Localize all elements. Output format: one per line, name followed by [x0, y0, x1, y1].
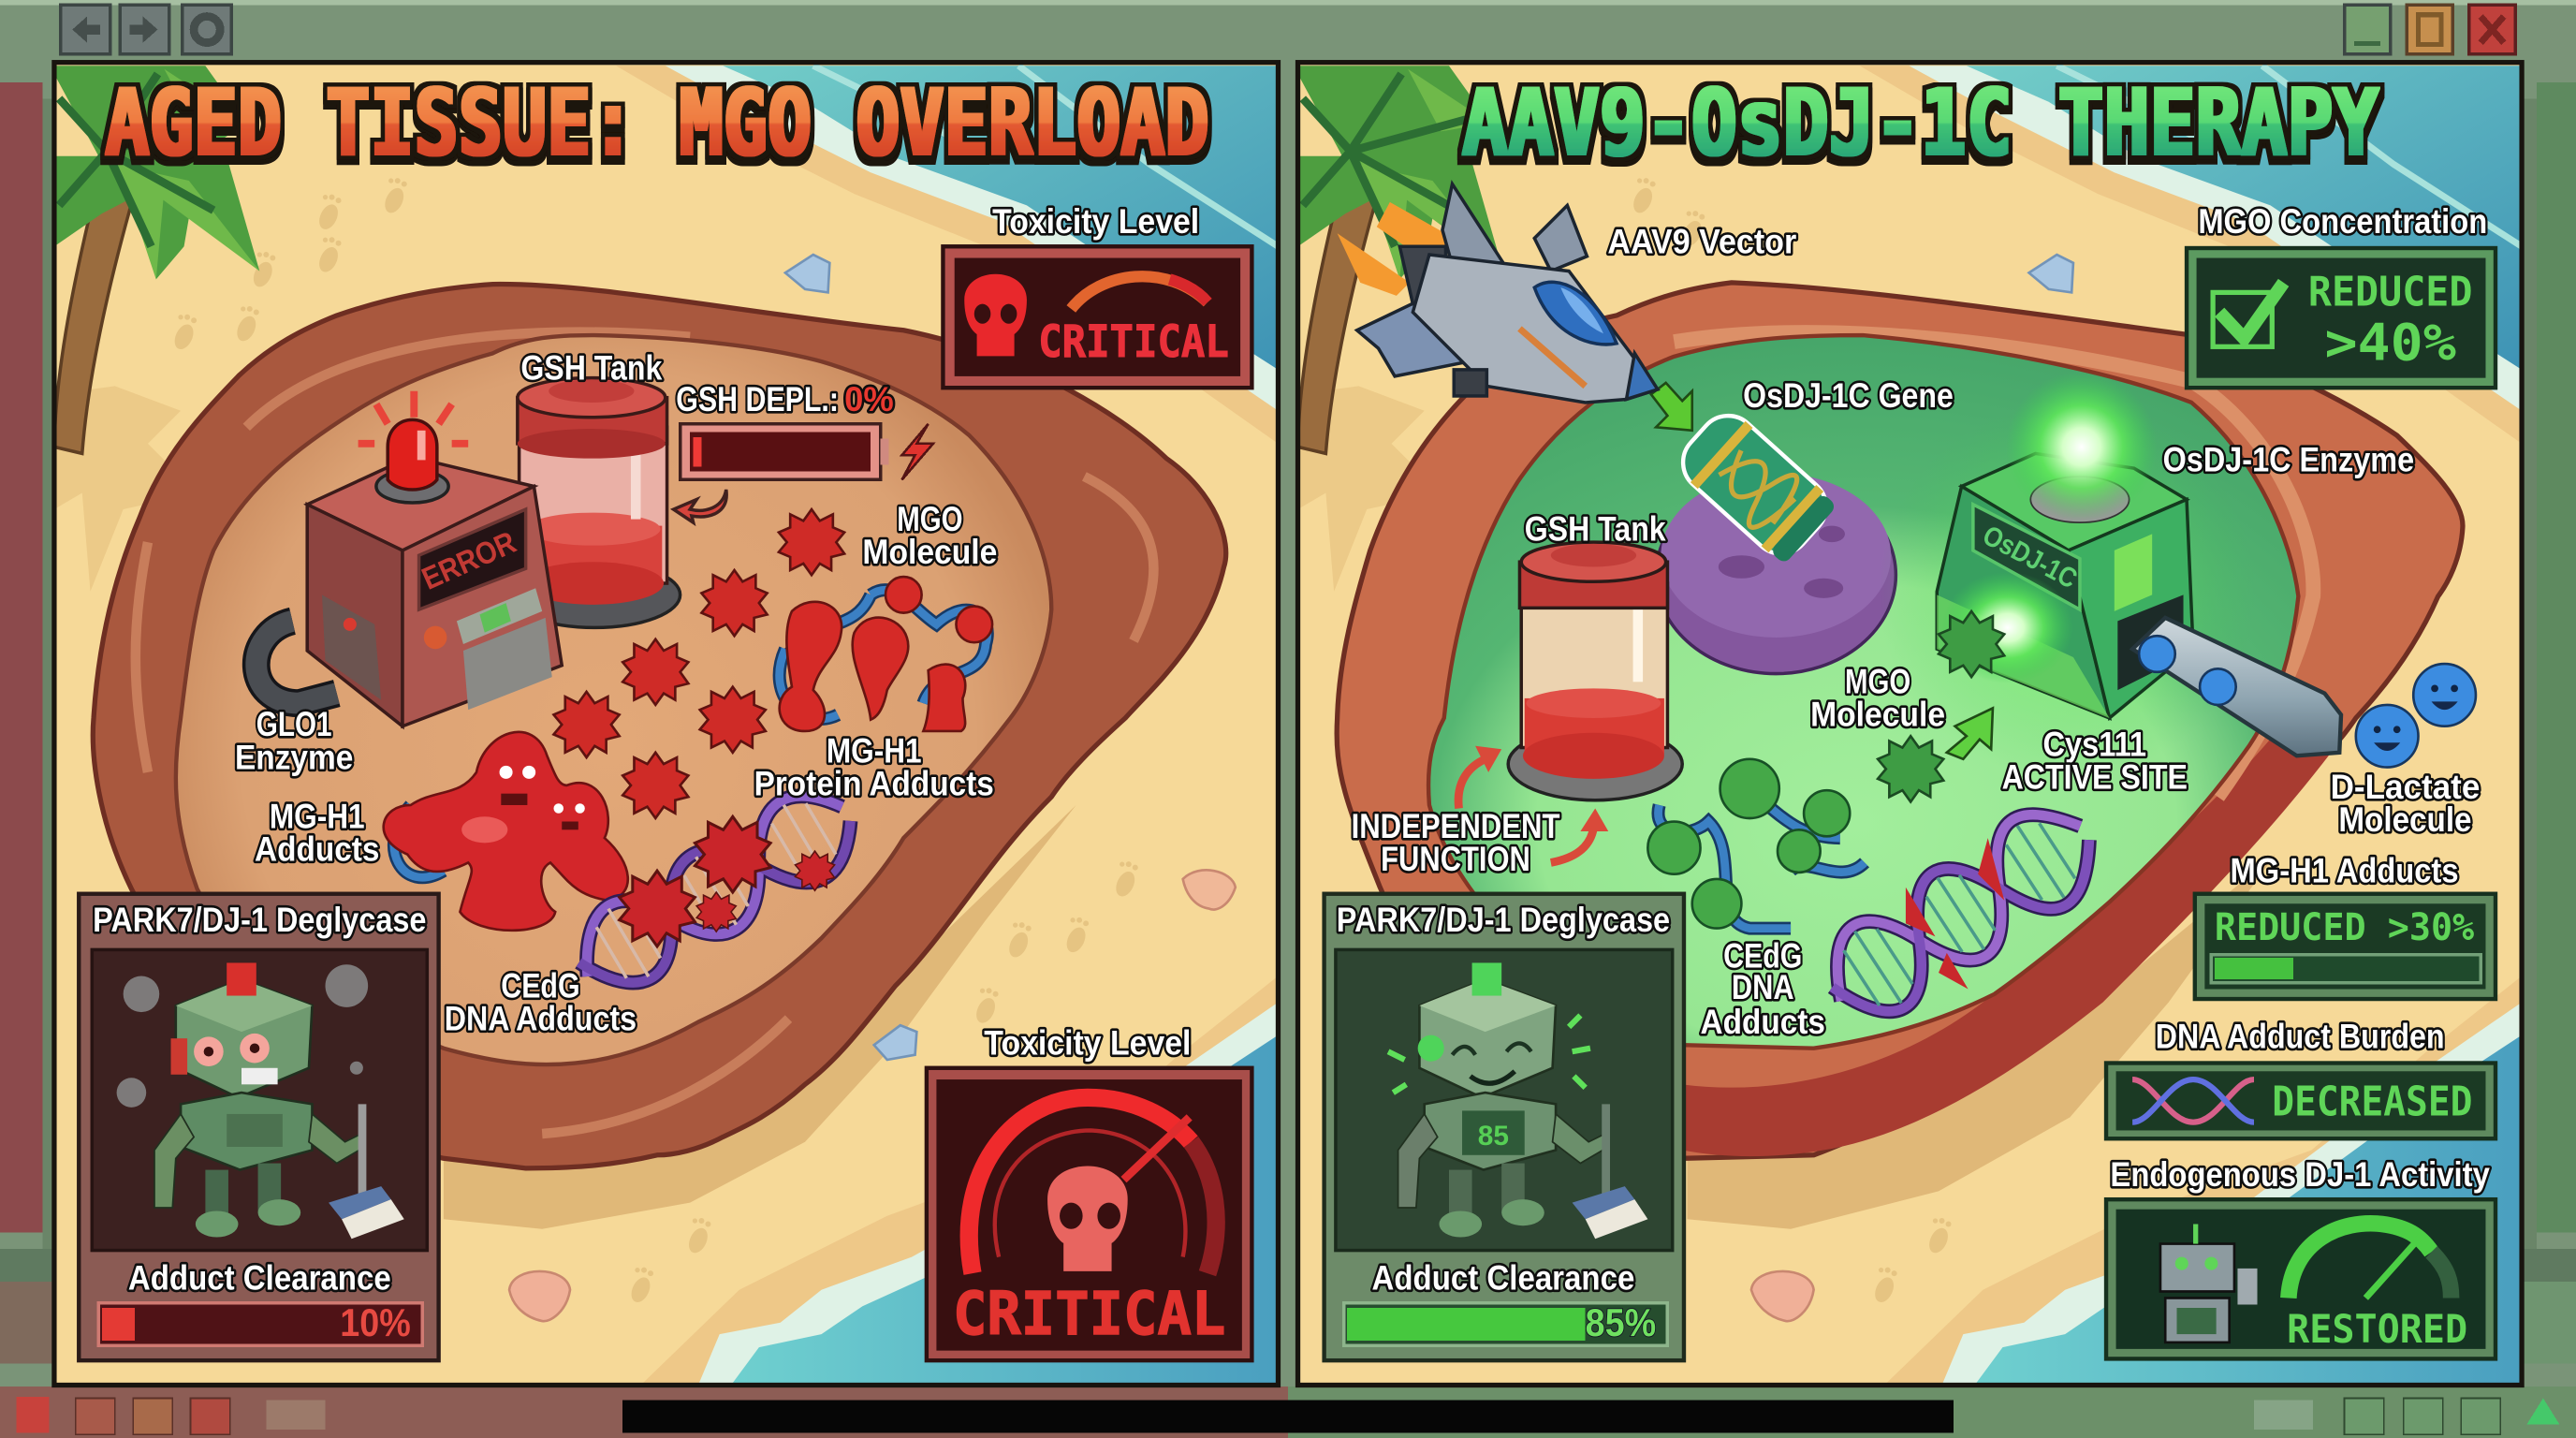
- arrow: mgo to site: [1947, 708, 1993, 759]
- footprints: [1630, 178, 1952, 1305]
- labels: therapy: MGO: [1845, 663, 1910, 701]
- osdj-1c gene capsule: [1671, 404, 1838, 565]
- icon: big skull: [1047, 1166, 1128, 1271]
- cell interior: [1428, 335, 2298, 1049]
- restored: RESTORED: [2287, 1306, 2467, 1352]
- membrane highlight streaks: [136, 332, 1153, 1134]
- labels: aged tissue: MG-H1: [270, 798, 365, 836]
- osdj-1c enzyme machine: [1937, 372, 2193, 718]
- membrane dark lower rim: [1682, 723, 2341, 1156]
- icon: dna: [2132, 1079, 2254, 1123]
- palm shadow: [1298, 386, 1441, 592]
- labels: aged tissue: 0%: [844, 380, 894, 418]
- right taskbar buttons: [2254, 1399, 2559, 1434]
- robot: broken: [117, 962, 404, 1239]
- critical big text: CRITICAL: [953, 1279, 1225, 1348]
- adduct clearance label: Adduct Clearance: [128, 1259, 391, 1298]
- title text: PARK7/DJ-1 Deglycase: [1337, 901, 1670, 939]
- labels: therapy: [1352, 222, 2480, 1041]
- top-left navigation buttons: [61, 5, 231, 54]
- shell bottom: [1751, 1271, 1814, 1321]
- reduced: REDUCED: [2308, 268, 2472, 315]
- dna repaired: [1809, 791, 2112, 1036]
- gauge: [2289, 1224, 2452, 1298]
- labels: therapy: D-Lactate: [2331, 768, 2480, 806]
- conveyor slide: [2132, 618, 2341, 756]
- 10 percent: 10%: [340, 1300, 411, 1344]
- right green side column: [2522, 82, 2576, 1364]
- reduced 30: REDUCED >30%: [2215, 905, 2475, 949]
- title: therapy: AAV9-OsDJ-1C THERAPY: [1462, 70, 2378, 177]
- panel: mg-h1 adducts: [2195, 894, 2496, 999]
- shell right: [1183, 870, 1236, 910]
- title: aged tissue: AGED TISSUE: MGO OVERLOAD: [105, 70, 1209, 177]
- heading: mgo concentration: MGO Concentration: [2198, 202, 2487, 241]
- heading: toxicity level lower: Toxicity Level: [984, 1024, 1191, 1063]
- panel: deglycase broken robot: [79, 894, 439, 1360]
- labels: therapy: Adducts: [1701, 1003, 1825, 1041]
- independent arrows: [1458, 746, 1608, 862]
- enzyme glow: [1878, 403, 2256, 781]
- d-lactate smiles: [2139, 636, 2476, 768]
- aav9 vector ship: [1338, 184, 1658, 403]
- panel: therapy: [1298, 63, 2522, 1385]
- labels: therapy: Molecule: [1810, 696, 1945, 734]
- robot: happy: 85: [1478, 1121, 1509, 1152]
- nucleus: [1656, 473, 1895, 674]
- bottom taskbar: [17, 1397, 2559, 1434]
- icon: check: [2213, 283, 2284, 346]
- heading: toxicity level: Toxicity Level: [992, 202, 1199, 241]
- icon: red siren: [359, 391, 468, 503]
- cedg dna with adducts: [561, 776, 869, 1007]
- labels: therapy: AAV9 Vector: [1607, 222, 1796, 260]
- left red side column: [0, 82, 54, 1364]
- panel border: [54, 63, 1278, 1385]
- labels: therapy: DNA: [1732, 968, 1794, 1006]
- labels: therapy: OsDJ-1C Gene: [1743, 376, 1954, 415]
- labels: therapy: Cys111: [2042, 725, 2146, 763]
- gsh battery gauge: [681, 424, 933, 479]
- labels: aged tissue: Molecule: [862, 533, 997, 571]
- left taskbar buttons: [17, 1397, 326, 1434]
- arrow: depletion: [674, 490, 726, 522]
- blue rock lower: [874, 1025, 916, 1060]
- glo1 enzyme machine: ERROR: [417, 525, 521, 597]
- labels: aged tissue: GSH Tank: [520, 348, 663, 387]
- labels: therapy: ACTIVE SITE: [2002, 757, 2188, 796]
- top-right window controls: [2345, 5, 2515, 54]
- labels: therapy: INDEPENDENT: [1352, 807, 1560, 845]
- adduct clearance bar: [1344, 1303, 1667, 1345]
- green protein: [1647, 759, 1865, 929]
- scroll track: [622, 1400, 1954, 1432]
- mgo molecules: [553, 509, 844, 818]
- adduct clearance label: Adduct Clearance: [1372, 1259, 1634, 1298]
- labels: therapy: GSH Tank: [1525, 509, 1666, 548]
- gsh tank: [1508, 542, 1682, 800]
- labels: therapy: FUNCTION: [1381, 840, 1530, 878]
- bar: [2211, 955, 2481, 983]
- blue rock: [785, 255, 829, 292]
- palm tree: [1298, 66, 1503, 453]
- green mgo molecules: [1878, 611, 2004, 801]
- greater 40: >40%: [2324, 313, 2456, 372]
- mg-h1 adducts blob: [384, 732, 628, 931]
- labels: aged tissue: MGO: [897, 500, 962, 538]
- labels: therapy: CEdG: [1723, 937, 1802, 976]
- palm tree: [54, 66, 259, 453]
- adduct clearance bar: [98, 1303, 422, 1345]
- labels: aged tissue: GSH DEPL.:: [676, 380, 839, 418]
- labels: aged tissue: MG-H1: [827, 731, 922, 770]
- heading: endogenous activity: Endogenous DJ-1 Activity: [2110, 1155, 2490, 1194]
- labels: therapy: OsDJ-1C Enzyme: [2163, 441, 2414, 479]
- panel border: [1298, 63, 2522, 1385]
- labels: aged tissue: [235, 348, 997, 1037]
- smoke: [117, 964, 368, 1108]
- footprints on the sand: [171, 178, 1138, 1305]
- heading: mg-h1 adducts: MG-H1 Adducts: [2231, 851, 2459, 889]
- labels: aged tissue: GLO1: [256, 705, 332, 743]
- labels: aged tissue: Protein Adducts: [754, 764, 994, 802]
- shell bottom: [509, 1271, 570, 1321]
- labels: aged tissue: DNA Adducts: [445, 999, 637, 1037]
- icon: thumbs up robot: [2160, 1224, 2258, 1343]
- panel: toxicity level large: [927, 1068, 1251, 1360]
- membrane light band: [1674, 332, 2313, 797]
- panel: endogenous activity: [2106, 1199, 2496, 1358]
- panel: dna adduct burden: [2106, 1064, 2496, 1138]
- icon: skull: [964, 274, 1027, 356]
- panel: aged tissue: [54, 63, 1278, 1385]
- osdj-1c enzyme machine: OsDJ-1C: [1978, 520, 2082, 594]
- glo1 enzyme machine: [256, 391, 562, 726]
- blue rock: [2029, 255, 2073, 292]
- title text: PARK7/DJ-1 Deglycase: [93, 901, 426, 939]
- labels: aged tissue: Adducts: [255, 830, 379, 869]
- gauge: [969, 1097, 1216, 1273]
- mg-h1 protein adducts: [780, 577, 992, 731]
- glowing emitter: [2006, 372, 2157, 522]
- labels: aged tissue: Enzyme: [235, 738, 353, 776]
- critical text: CRITICAL: [1038, 316, 1229, 368]
- gsh tank: [509, 378, 681, 627]
- cell membrane outer: [93, 285, 1226, 1168]
- cell shadow: [1687, 855, 2276, 1229]
- labels: therapy: Molecule: [2338, 800, 2472, 839]
- active site glow: [1942, 572, 2073, 683]
- palm shadow: [54, 386, 198, 592]
- decreased: DECREASED: [2272, 1078, 2472, 1126]
- labels: aged tissue: CEdG: [501, 966, 580, 1005]
- robot: happy: [1388, 962, 1647, 1239]
- panel: deglycase happy robot: [1325, 894, 1684, 1360]
- panel: toxicity level small: [943, 246, 1251, 388]
- left bottom bar: [0, 1387, 1288, 1438]
- heading: dna burden: DNA Adduct Burden: [2156, 1018, 2445, 1056]
- cell shadow: [444, 805, 1076, 1229]
- cell membrane outer: [1337, 283, 2463, 1158]
- icon: gauge arc: [1071, 276, 1208, 309]
- arrow: gene delivery: [1651, 383, 1692, 431]
- panel: mgo concentration: [2187, 248, 2496, 388]
- cell interior cytoplasm: [176, 335, 1051, 1064]
- 85 percent: 85%: [1586, 1300, 1656, 1344]
- right bottom bar: [1288, 1387, 2576, 1438]
